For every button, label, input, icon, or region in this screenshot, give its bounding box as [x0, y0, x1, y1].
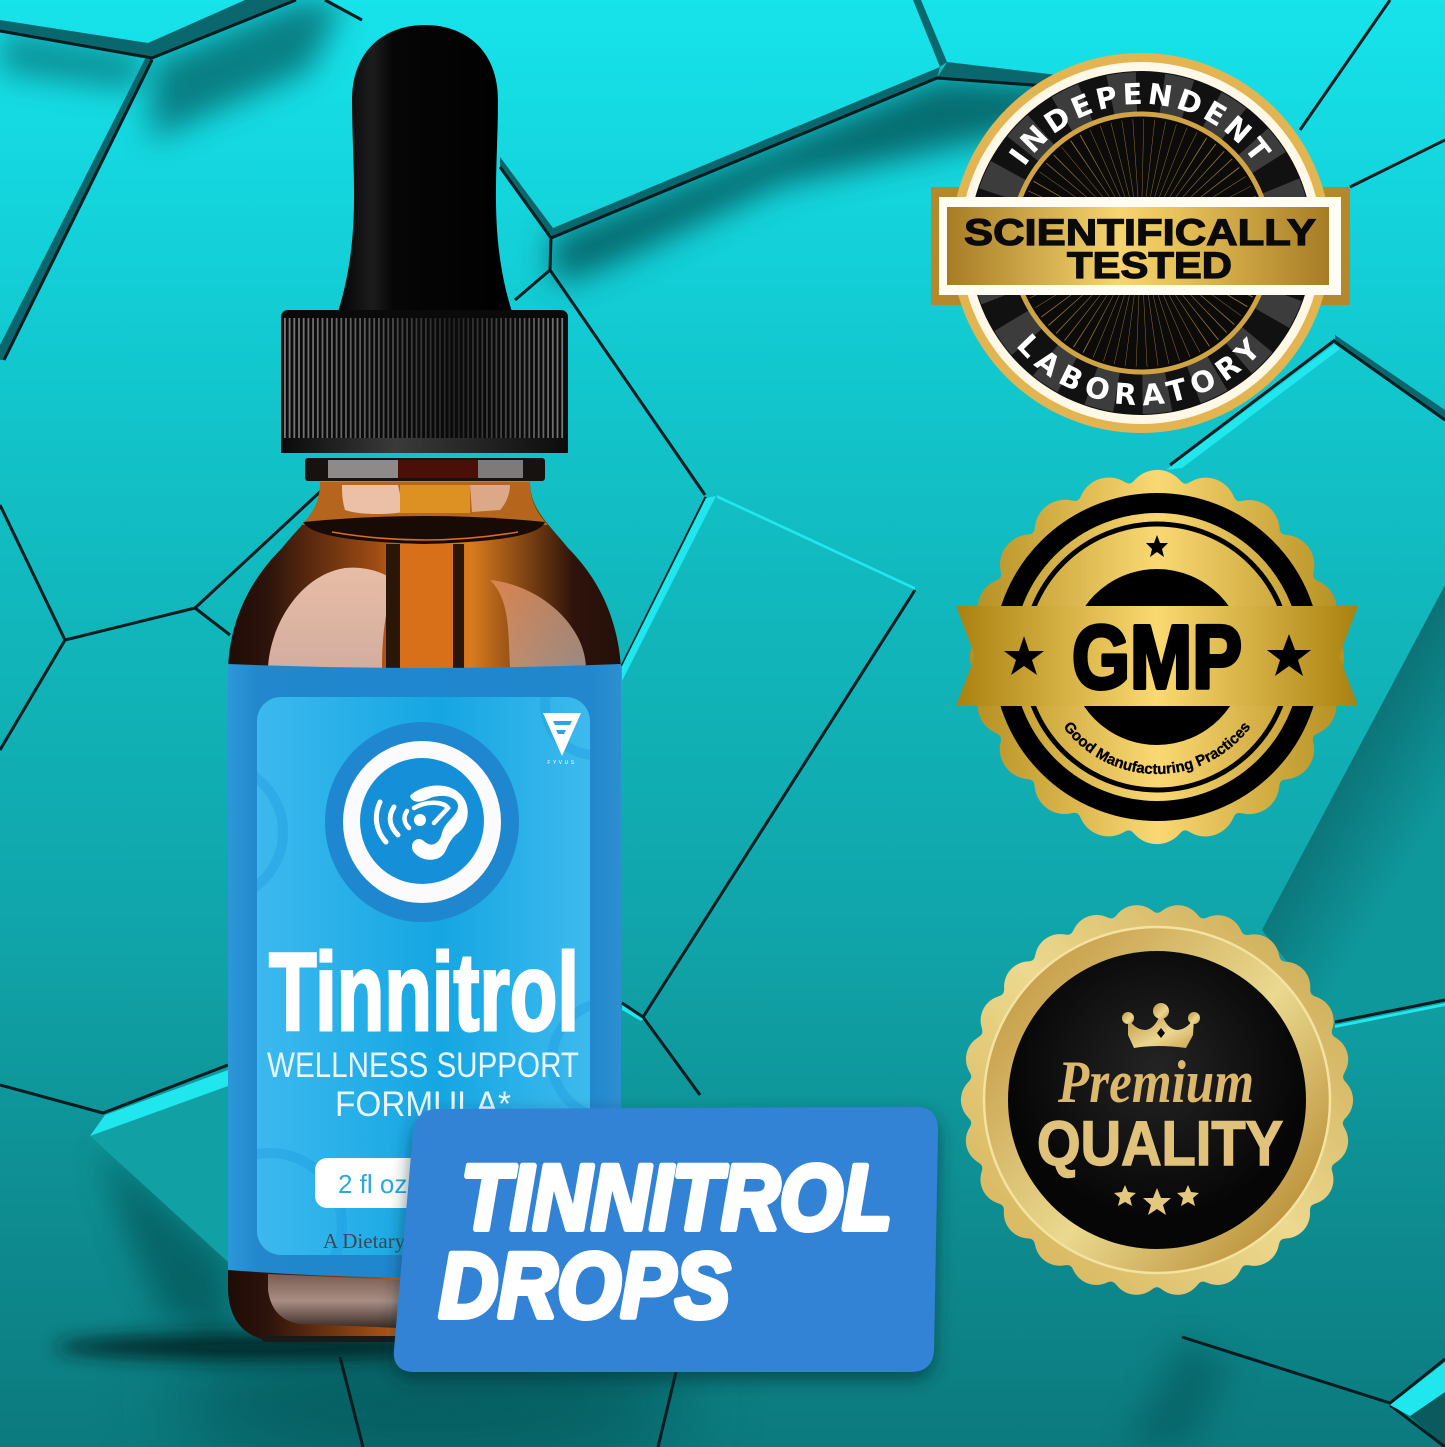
ribbon line 1: SCIENTIFICALLY: [964, 212, 1316, 253]
label subtitle line 1: WELLNESS SUPPORT: [267, 1046, 579, 1085]
label base: [228, 664, 621, 1278]
brand mark: [543, 713, 581, 766]
neck amber center: [400, 485, 470, 513]
black center: [1008, 951, 1306, 1249]
logo center: [360, 758, 484, 884]
ribbed cap: [281, 310, 568, 453]
scalloped edge: [979, 922, 1335, 1278]
ribbon banner: [956, 606, 1358, 706]
card title line 2: DROPS: [439, 1235, 730, 1337]
thin ring: [1024, 524, 1290, 790]
card title line 1: TINNITROL: [461, 1147, 892, 1249]
ground shadow under bottle: [55, 1334, 465, 1360]
bottom dark rim: [262, 1336, 402, 1342]
dropper tube: [386, 544, 465, 669]
label subtitle line 2: FORMULA*: [335, 1085, 511, 1124]
outer gold ring: [951, 53, 1331, 433]
dietary line: A Dietary: [323, 1229, 406, 1253]
ray center: [1111, 213, 1171, 273]
logo outer ring: [325, 722, 519, 922]
badge: premium quality: [979, 922, 1335, 1278]
ribbon white frame: [939, 197, 1341, 295]
top star: [1146, 535, 1168, 557]
badge: scientifically tested: [931, 53, 1350, 433]
arc caption: Good Manufacturing Practices: [1065, 722, 1250, 774]
right glass highlight: [490, 580, 586, 668]
label panel: [257, 697, 590, 1255]
neck highlights: [342, 485, 404, 514]
ribbon line 2: TESTED: [1067, 245, 1232, 286]
inner gold ring: [1012, 114, 1270, 372]
dark ring: [969, 71, 1313, 415]
faint panel rings: [257, 697, 590, 1255]
scalloped edge: [989, 489, 1325, 825]
logo white ring: [343, 741, 501, 903]
neck silver left: [328, 460, 398, 478]
center black disc: [1069, 569, 1245, 745]
arc text bottom: LABORATORY: [1017, 333, 1256, 406]
ear logo: [325, 722, 519, 922]
neck silver right: [478, 460, 523, 478]
quality text: QUALITY: [1037, 1109, 1283, 1179]
volume pill: [315, 1158, 475, 1208]
ribbon back: [931, 187, 1350, 305]
ribbon gold plate: [947, 207, 1329, 285]
neck red: [398, 460, 478, 478]
ring streak: [332, 532, 518, 540]
blue product card: [394, 1107, 938, 1372]
black ring: [1003, 503, 1311, 811]
crown: [1122, 1003, 1200, 1048]
volume pill: 2 fl oz: [338, 1169, 407, 1199]
ear icon: [376, 785, 468, 860]
ring segments: [991, 93, 1291, 393]
dropper bulb: [338, 25, 512, 312]
premium script: Premium: [1057, 1049, 1254, 1115]
background bevels: [0, 0, 1445, 420]
bottle glass body: [228, 482, 621, 1342]
cap ribs: [284, 318, 566, 438]
neck ring: [305, 458, 545, 481]
right star: [1267, 634, 1311, 676]
badge: GMP: [956, 470, 1358, 844]
sun rays: [1076, 178, 1206, 308]
product name: Tinnitrol: [269, 931, 579, 1054]
background bright facet edges: [90, 344, 1445, 1416]
neck amber zone: [302, 482, 548, 525]
dark liquid ring: [303, 516, 545, 544]
product bottle: [228, 25, 621, 1342]
pale inner rim: [984, 927, 1330, 1273]
left glass highlight: [268, 568, 398, 668]
gold inner band: [985, 928, 1329, 1272]
neck highlight right: [470, 485, 510, 512]
left star: [1004, 636, 1044, 675]
bottom glass highlight: [268, 1274, 400, 1328]
cap bottom band: [281, 438, 568, 453]
white ring: [960, 62, 1322, 424]
GMP letters: GMP: [1072, 608, 1242, 708]
three stars: [1114, 1185, 1199, 1215]
arc text top: INDEPENDENT: [1008, 82, 1272, 165]
brand mark: FYVUS: [547, 760, 577, 766]
